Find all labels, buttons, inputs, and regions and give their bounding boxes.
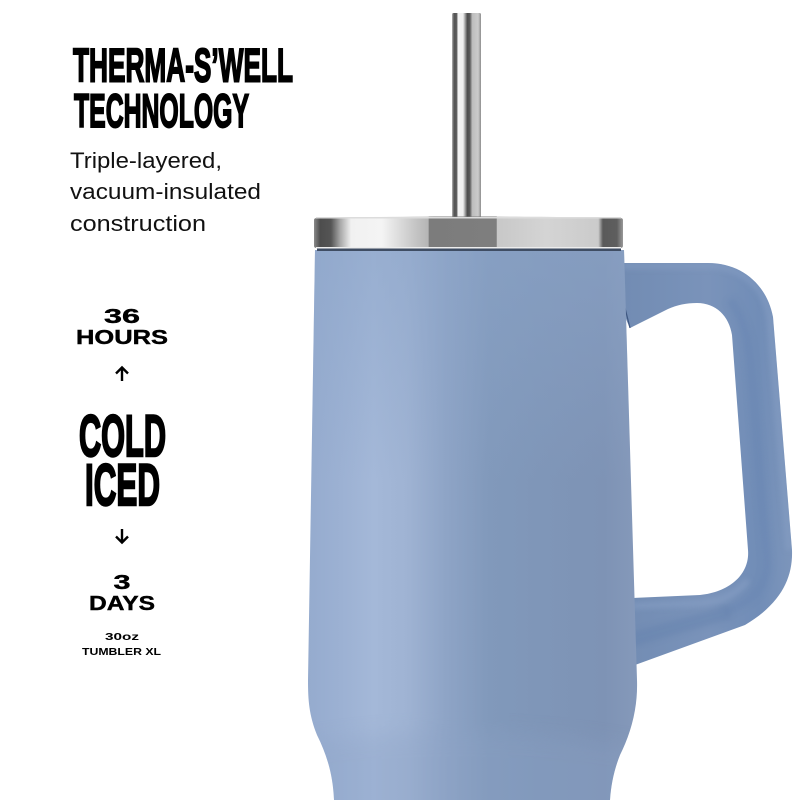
title — [73, 39, 293, 137]
tumbler illustration: lid — [314, 216, 623, 251]
text: COLD — [79, 404, 166, 469]
icon: up arrow — [116, 368, 128, 381]
product name: TUMBLER XL — [82, 646, 162, 658]
text: TECHNOLOGY — [74, 85, 249, 137]
product name: 30oz — [105, 631, 139, 643]
stat: 36 hours: HOURS — [76, 327, 168, 349]
description text: Triple-layered, — [70, 148, 222, 173]
stat: 36 hours — [76, 306, 168, 349]
icon: down arrow — [116, 529, 128, 542]
text: ICED — [85, 453, 160, 518]
description text — [70, 148, 261, 236]
product name — [82, 631, 162, 658]
stat: 3 days — [89, 572, 155, 615]
straw — [452, 13, 481, 218]
tumbler illustration: body — [308, 250, 638, 800]
description text: vacuum-insulated — [70, 179, 261, 204]
stat: 36 hours: 36 — [104, 306, 140, 328]
stat: 3 days: DAYS — [89, 593, 155, 615]
stat: 3 days: 3 — [114, 572, 130, 594]
tumbler illustration: handle — [622, 263, 792, 665]
cold iced label — [79, 404, 166, 518]
description text: construction — [70, 211, 206, 236]
